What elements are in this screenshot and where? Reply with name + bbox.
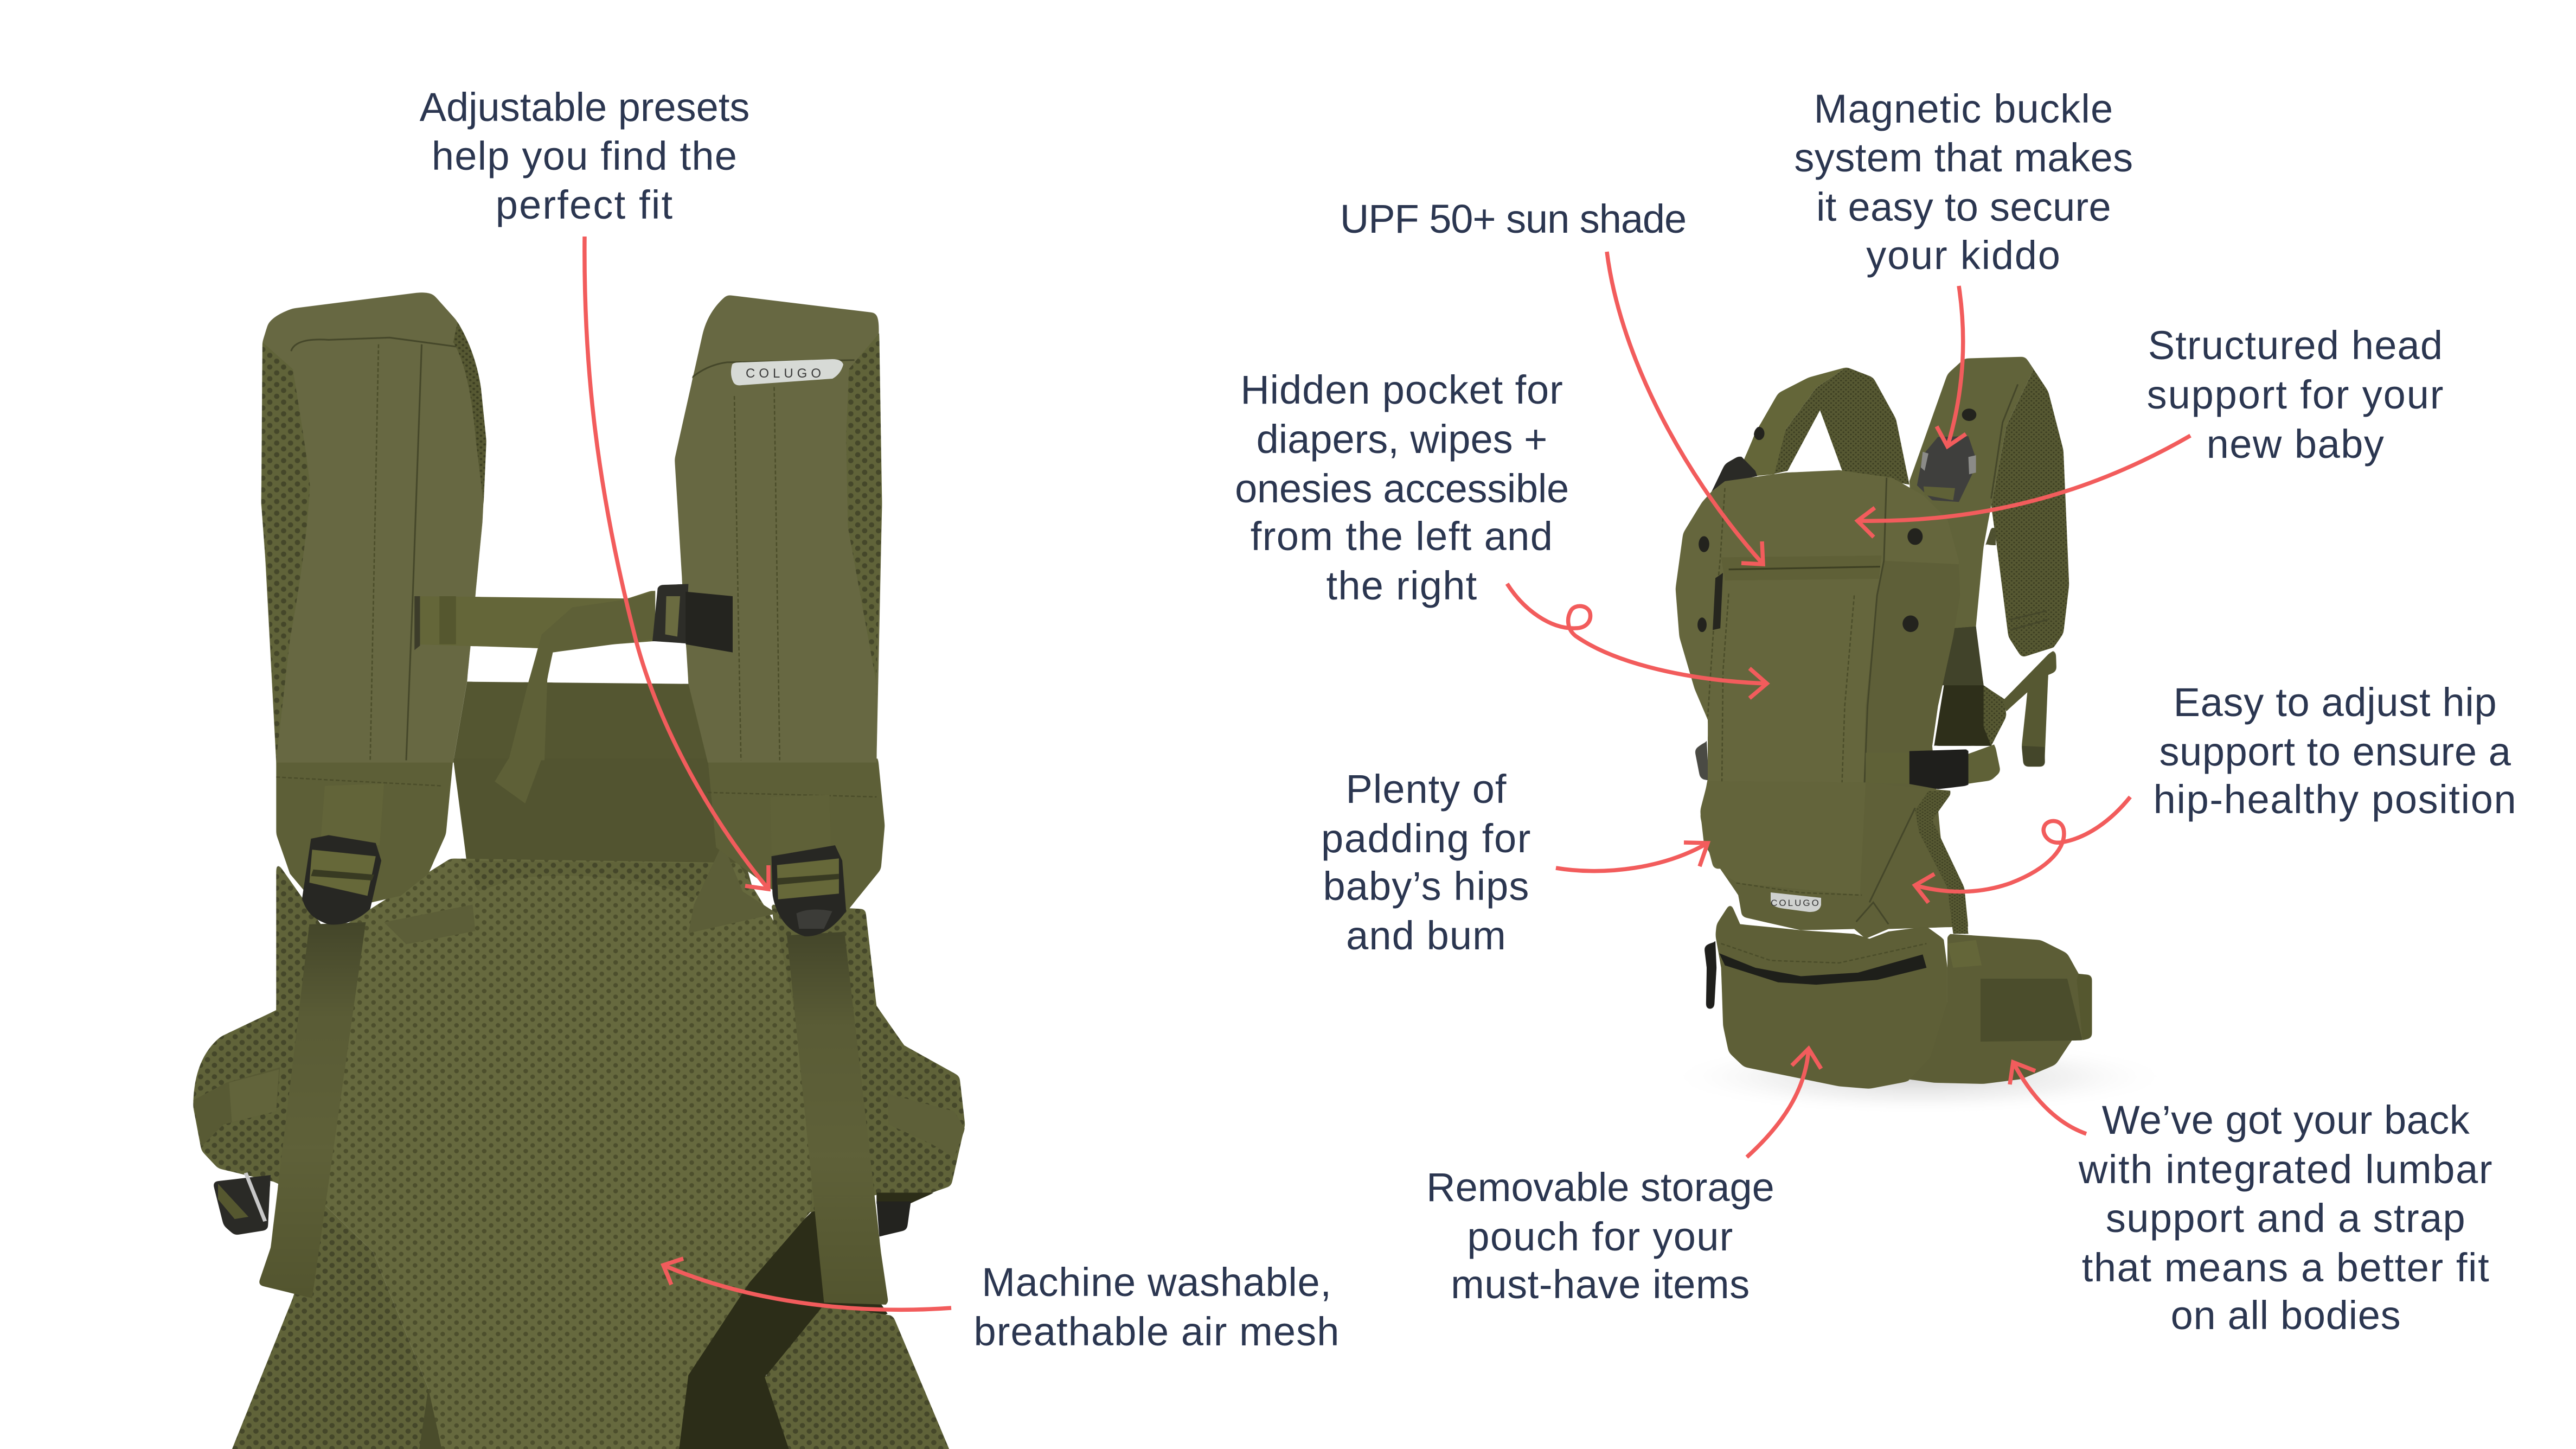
- text: sun shade: UPF 50+ sun shade: [1340, 196, 1686, 241]
- far shoulder strap: [1909, 356, 2069, 658]
- text: hips padding: Plenty of: [1346, 767, 1507, 812]
- text: hip support: support to ensure a: [2159, 729, 2511, 774]
- text: adjustable presets: Adjustable presets: [420, 85, 749, 130]
- text: head support: support for your: [2147, 372, 2444, 417]
- hanging strap end: [495, 758, 542, 803]
- arrow: lumbar support: [2010, 1062, 2086, 1134]
- side buckles: [213, 1173, 911, 1237]
- strap lower padding: [276, 758, 885, 914]
- colugo label on body: COLUGO: [1771, 898, 1821, 908]
- text: storage pouch: Removable storage: [1426, 1165, 1774, 1210]
- main body panel: [1675, 470, 1960, 869]
- text: magnetic buckle: system that makes: [1794, 135, 2133, 180]
- colugo label on body: [1771, 892, 1821, 912]
- chest strap and buckle: [414, 584, 733, 761]
- text: hidden pocket: Hidden pocket for: [1240, 367, 1563, 412]
- waist belt and buckle: [1866, 744, 2001, 789]
- text: head support: new baby: [2207, 422, 2385, 467]
- ground shadow: [1665, 1039, 2175, 1115]
- text: adjustable presets: perfect fit: [496, 182, 674, 227]
- interior mesh: [1934, 627, 2007, 746]
- lower body: [1700, 781, 1969, 939]
- text: lumbar support: We’ve got your back: [2102, 1097, 2470, 1142]
- mesh body: [193, 843, 965, 1449]
- text: air mesh: breathable air mesh: [974, 1309, 1340, 1354]
- text: hidden pocket: from the left and: [1251, 514, 1553, 559]
- back webbing and buckles: [258, 784, 889, 1305]
- zip pocket: [1713, 556, 1882, 630]
- snap rivets: [1697, 408, 1976, 632]
- arrow: adjustable presets: [585, 237, 768, 889]
- text: storage pouch: must-have items: [1451, 1262, 1750, 1307]
- magnetic buckle: [1917, 436, 1976, 502]
- right shoulder strap: [675, 295, 882, 763]
- text: hip support: hip-healthy position: [2154, 777, 2517, 822]
- arrow: magnetic buckle: [1937, 286, 1966, 446]
- arrow: hidden pocket: [1507, 584, 1767, 698]
- storage pouch: [1704, 902, 1947, 1089]
- left black buckle: [1712, 455, 1757, 491]
- arrow: hip support: [1915, 797, 2130, 903]
- text: magnetic buckle: Magnetic buckle: [1814, 86, 2113, 131]
- text: storage pouch: pouch for your: [1467, 1214, 1734, 1259]
- carrier front view photo: [1675, 356, 2092, 1089]
- text: hip support: Easy to adjust hip: [2174, 680, 2497, 725]
- near shoulder strap arch: [1736, 367, 1909, 484]
- text: lumbar support: support and a strap: [2106, 1196, 2466, 1241]
- text: hidden pocket: the right: [1326, 563, 1478, 608]
- text: magnetic buckle: it easy to secure: [1816, 184, 2111, 229]
- text: lumbar support: that means a better fit: [2082, 1245, 2490, 1290]
- text: hips padding: padding for: [1321, 816, 1531, 861]
- left shoulder strap: [261, 292, 486, 763]
- text: lumbar support: with integrated lumbar: [2078, 1147, 2493, 1192]
- arrow: sun shade: [1607, 252, 1763, 564]
- arrow: head support: [1857, 436, 2190, 537]
- arrow: storage pouch: [1747, 1049, 1821, 1157]
- hanging side strap: [1985, 528, 2056, 767]
- colugo label on strap: COLUGO: [746, 366, 825, 381]
- text: air mesh: Machine washable,: [982, 1260, 1332, 1305]
- text: lumbar support: on all bodies: [2171, 1293, 2401, 1338]
- text: magnetic buckle: your kiddo: [1866, 233, 2061, 278]
- text: head support: Structured head: [2148, 323, 2443, 368]
- small side buckle: [1694, 741, 1709, 781]
- hip belt: [1907, 934, 2092, 1084]
- arrow: air mesh: [663, 1259, 951, 1310]
- hip wing straps: [193, 1067, 965, 1158]
- arrow: hips padding: [1556, 842, 1708, 871]
- text: hips padding: baby’s hips: [1323, 864, 1529, 909]
- colugo label on strap: [731, 359, 843, 385]
- text: adjustable presets: help you find the: [432, 133, 738, 178]
- text: hidden pocket: onesies accessible: [1235, 466, 1569, 511]
- back panel between straps: [453, 681, 755, 896]
- text: hips padding: and bum: [1346, 913, 1507, 958]
- carrier back view photo: [193, 292, 965, 1449]
- text: hidden pocket: diapers, wipes +: [1257, 417, 1547, 462]
